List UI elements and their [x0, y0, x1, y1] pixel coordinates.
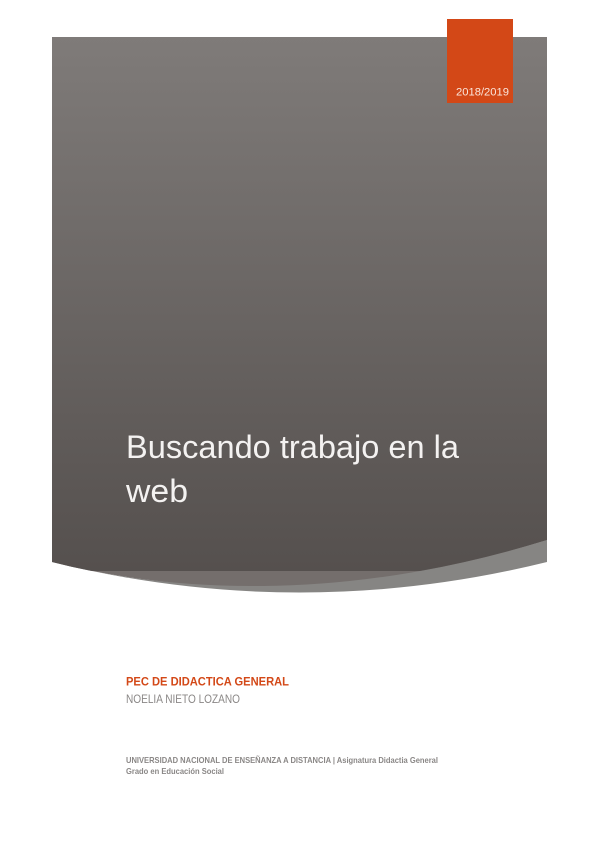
footer text: Grado en Educación Social [126, 766, 224, 776]
title [125, 429, 459, 509]
author: NOELIA NIETO LOZANO [126, 694, 240, 706]
grey swoosh [52, 540, 547, 592]
title: Buscando trabajo en la [126, 429, 459, 465]
title: web [125, 473, 188, 509]
cover page [52, 19, 547, 774]
subtitle: PEC DE DIDACTICA GENERAL [126, 674, 289, 688]
footer text [126, 755, 438, 776]
date: 2018/2019 [456, 86, 509, 98]
dark gradient panel [52, 37, 547, 586]
lower band of the panel [52, 530, 547, 586]
orange date tab [447, 19, 513, 103]
footer text: UNIVERSIDAD NACIONAL DE ENSEÑANZA A DISTANCIA | Asignatura Didactia General [126, 755, 438, 765]
